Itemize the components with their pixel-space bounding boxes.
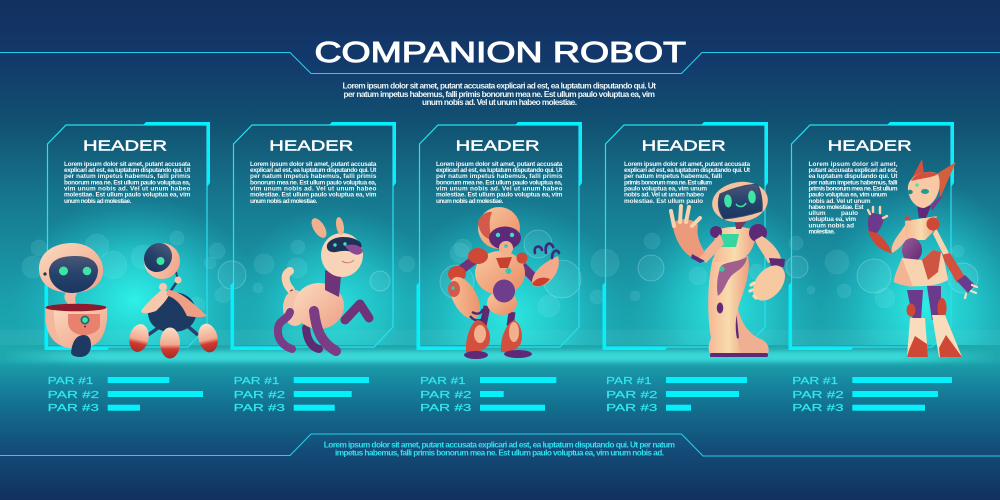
panel 2 text: molestiae. Est ullum paulo voluptua ea, vim	[250, 192, 377, 199]
robot 1a: wheeled bot	[39, 243, 107, 357]
panel 5 text: molestiae.	[808, 228, 835, 236]
panel 5 text: ullum	[808, 210, 826, 217]
panel 5 text: unum nobis ad	[808, 222, 854, 229]
robot 3: humanoid	[444, 207, 559, 359]
panel 2 text: Lorem ipsum dolor sit amet, putant accusata	[250, 161, 377, 168]
panel 4 text: molestiae. Est ullum paulo	[624, 198, 703, 205]
parameters panel 4: PAR #3	[606, 403, 658, 414]
parameters panel 2: PAR #1	[234, 376, 280, 387]
parameters panel 4	[606, 376, 747, 414]
parameters panel 5	[792, 376, 952, 414]
intro text: Lorem ipsum dolor sit amet, putant accusata explicari ad est, ea luptatum disputando qui. Ut	[342, 81, 656, 91]
robot 5: female android	[868, 159, 977, 357]
parameters panel 1	[48, 376, 203, 414]
panel 3 text: explicari ad est, ea luptatum disputando qui. Ut	[436, 167, 563, 174]
panel 2 text: per natum impetus habemus, falli primis	[250, 173, 377, 180]
panel 4 text: nobis ad. Vel ut unum habeo	[624, 192, 704, 199]
parameters panel 3: PAR #3	[420, 403, 472, 414]
panel frame 2	[230, 122, 396, 350]
parameters panel 5: PAR #2	[792, 390, 844, 401]
parameters panel 3: PAR #1	[420, 376, 466, 387]
panel 3 text: Lorem ipsum dolor sit amet, putant accusata	[436, 161, 563, 168]
parameters panel 2: PAR #3	[234, 403, 285, 414]
panel frame 5	[788, 122, 954, 350]
panel 5 text: Lorem ipsum dolor sit amet,	[808, 161, 898, 168]
panel 1 text	[64, 161, 191, 205]
panel 3 text: per natum impetus habemus, falli primis	[436, 173, 563, 180]
title rule lines	[0, 52, 1000, 74]
intro text: unum nobis ad. Vel ut unum habeo molestiae.	[422, 97, 577, 107]
panel 1 text: unum nobis ad molestiae.	[64, 198, 132, 205]
panel 5 text: ea luptatum disputando qui. Ut	[808, 173, 898, 180]
parameters panel 1: PAR #1	[48, 376, 94, 387]
parameters panel 2: PAR #2	[234, 390, 286, 401]
intro text	[342, 81, 656, 107]
panel 4 heading: HEADER	[642, 138, 726, 155]
robot 2: dog	[278, 216, 369, 351]
robot 4: android	[671, 178, 792, 357]
panel 5 text	[808, 161, 898, 236]
panel 4 text: paulo voluptua ea, vim unum	[624, 186, 707, 192]
panel 3 text: bonorum mea ne. Est ullum paulo voluptua ea,	[436, 179, 563, 186]
panel 5 text: per natum impetus habemus, falli	[808, 179, 898, 186]
panel 5 text: habeo molestiae. Est	[808, 204, 864, 211]
panel 4 text: Lorem ipsum dolor sit amet, putant accusata	[624, 161, 750, 168]
panel 5 text: nobis ad. Vel ut unum	[808, 198, 871, 205]
panel 3 heading: HEADER	[456, 138, 540, 155]
intro text: per natum impetus habemus, falli primis bonorum mea ne. Est ullum paulo voluptua ea, vim	[344, 89, 655, 99]
panel 2 text: unum nobis ad molestiae.	[250, 198, 318, 205]
panel 4 text	[624, 161, 751, 205]
panel 1 text: bonorum mea ne. Est ullum paulo voluptua ea,	[64, 179, 191, 186]
footer rule lines	[0, 434, 1000, 456]
footer text: Lorem ipsum dolor sit amet, putant accusata explicari ad est, ea luptatum disputando qui. Ut per natum	[324, 440, 675, 450]
parameters panel 3	[420, 376, 556, 414]
panel 3 text	[436, 161, 563, 205]
panel 2 text: vim unum nobis ad. Vel ut unum habeo	[250, 186, 376, 192]
parameters panel 2	[234, 376, 369, 414]
footer text	[324, 440, 675, 458]
panel 5 text: primis bonorum mea ne. Est ullum	[808, 186, 898, 192]
panel 5 text: paulo	[841, 210, 858, 217]
panel 4 text: primis bonorum mea ne. Est ullum	[624, 179, 712, 186]
title: COMPANION ROBOT	[314, 37, 686, 69]
panel 1 text: per natum impetus habemus, falli primis	[64, 173, 191, 180]
floor	[0, 330, 1000, 500]
robot 1b: spider bot	[127, 237, 220, 358]
panel 5 text: paulo voluptua ea, vim unum	[808, 192, 887, 199]
panel frame 1	[44, 122, 210, 350]
panel 1 text: molestiae. Est ullum paulo voluptua ea, vim	[64, 192, 191, 199]
panel frame 3	[416, 122, 582, 350]
panel 3 text: molestiae. Est ullum paulo voluptua ea, vim	[436, 192, 563, 199]
panel 3 text: vim unum nobis ad. Vel ut unum habeo	[436, 186, 562, 192]
parameters panel 3: PAR #2	[420, 390, 472, 401]
panel 1 heading: HEADER	[83, 138, 167, 155]
parameters panel 4: PAR #1	[606, 376, 652, 387]
parameters panel 5: PAR #3	[792, 403, 844, 414]
glow behind robots	[10, 180, 1000, 430]
parameters panel 1: PAR #3	[48, 403, 99, 414]
parameters panel 4: PAR #2	[606, 390, 658, 401]
panel 5 heading: HEADER	[828, 138, 912, 155]
panel 2 text	[250, 161, 377, 205]
parameters panel 1: PAR #2	[48, 390, 100, 401]
panel 1 text: Lorem ipsum dolor sit amet, putant accusata	[64, 161, 191, 168]
panel 5 text: voluptua ea, vim	[808, 216, 856, 223]
panel 3 text: unum nobis ad molestiae.	[436, 198, 504, 205]
panel 2 heading: HEADER	[269, 138, 354, 155]
panel 5 text: putant accusata explicari ad est,	[808, 167, 898, 174]
floating bubbles	[22, 230, 978, 317]
panel 1 text: vim unum nobis ad. Vel ut unum habeo	[64, 186, 190, 192]
footer text: impetus habemus, falli primis bonorum mea ne. Est ullum paulo voluptua ea, vim unum nobis ad.	[335, 448, 664, 458]
parameters panel 5: PAR #1	[792, 376, 838, 387]
panel 1 text: explicari ad est, ea luptatum disputando qui. Ut	[64, 167, 191, 174]
panel 2 text: bonorum mea ne. Est ullum paulo voluptua ea,	[250, 179, 377, 186]
panel 2 text: explicari ad est, ea luptatum disputando qui. Ut	[250, 167, 377, 174]
panel frame 4	[602, 122, 768, 350]
panel 4 text: explicari ad est, ea luptatum disputando qui. Ut	[624, 167, 751, 174]
panel 4 text: per natum impetus habemus, falli	[624, 173, 722, 180]
